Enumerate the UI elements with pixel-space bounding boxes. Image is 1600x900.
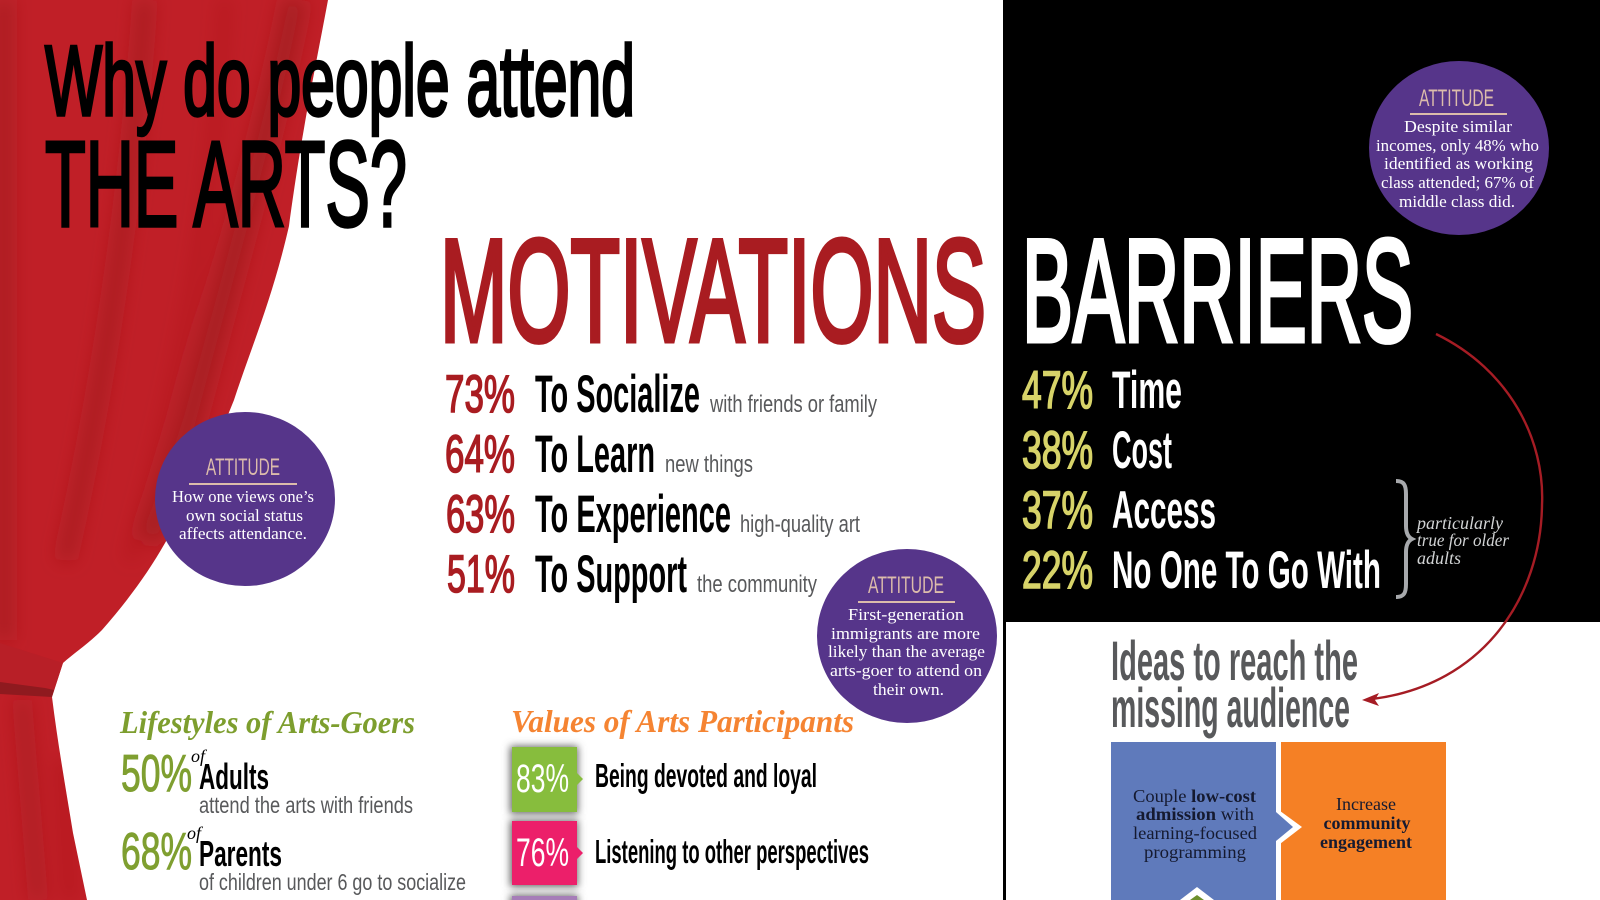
brace note: true for older (1417, 530, 1510, 550)
value: devoted and loyal: Being devoted and loyal (595, 757, 817, 794)
curtain (0, 0, 340, 900)
motivation: support: To Support (535, 545, 687, 604)
motivation: socialize: with friends or family (709, 391, 877, 418)
motivation: socialize: To Socialize (535, 365, 700, 424)
attitude circle: center (817, 549, 997, 723)
lifestyles heading: Lifestyles of Arts-Goers (119, 704, 415, 740)
motivation: learn: new things (665, 451, 753, 478)
heading: motivations: MOTIVATIONS (440, 209, 986, 372)
idea: community engagement: engagement (1320, 832, 1412, 852)
values section (510, 703, 869, 900)
values heading: Values of Arts Participants (511, 703, 854, 739)
attitude circle: top right: class attended; 67% of (1381, 173, 1534, 192)
attitude circle: top right: identified as working (1384, 154, 1534, 173)
motivation: experience: To Experience (535, 485, 731, 544)
motivation: learn: 64% (445, 425, 515, 484)
stat: adults: Adults (199, 756, 269, 797)
idea: community engagement: Increase (1336, 794, 1396, 814)
attitude circle: top right: Despite similar (1404, 117, 1512, 136)
barriers list (1022, 361, 1381, 600)
value: devoted and loyal: 83% (516, 757, 569, 801)
motivation: socialize (445, 365, 877, 424)
brace note (1415, 513, 1510, 568)
stat: parents: 68% (121, 823, 192, 881)
brace note: particularly (1415, 513, 1503, 533)
motivations list (445, 365, 877, 604)
barrier: time: 47% (1022, 361, 1093, 420)
stat: adults: attend the arts with friends (199, 792, 413, 818)
brace note: adults (1417, 548, 1461, 568)
value: other perspectives: Listening to other perspectives (595, 833, 869, 870)
barrier: time (1022, 361, 1182, 420)
attitude circle: top right: ATTITUDE (1419, 85, 1494, 112)
stat: adults: of (191, 746, 208, 766)
motivation: support: 51% (447, 545, 515, 604)
barrier: no one to go with: 22% (1022, 541, 1093, 600)
motivation: socialize: 73% (445, 365, 515, 424)
vertical divider line (1003, 622, 1006, 900)
arrow: barriers to ideas (1362, 334, 1542, 706)
stat: parents: Parents (199, 833, 282, 874)
attitude circle: center: ATTITUDE (868, 572, 944, 599)
barrier: no one to go with: No One To Go With (1112, 541, 1381, 600)
idea: low-cost admission: Couple low-cost (1133, 786, 1256, 806)
attitude circle: left: affects attendance. (179, 524, 307, 543)
stat: adults: 50% (121, 745, 192, 803)
attitude circle: left: ATTITUDE (206, 454, 280, 481)
brace (1396, 481, 1412, 597)
attitude circle: left: own social status (186, 506, 303, 525)
value: other perspectives (510, 820, 869, 887)
attitude circle: left: How one views one’s (172, 487, 314, 506)
barriers black panel (1003, 0, 1600, 622)
value: third box cropped (510, 895, 578, 900)
barrier: cost: Cost (1112, 421, 1172, 480)
barrier: time: Time (1112, 361, 1182, 420)
value: devoted and loyal (510, 746, 817, 814)
attitude circle: center: arts-goer to attend on (830, 661, 983, 680)
attitude circle: center: immigrants are more (831, 624, 980, 643)
barrier: access: 37% (1022, 481, 1093, 540)
icon: up chevron (1180, 887, 1214, 900)
barrier: access: Access (1112, 481, 1216, 540)
stat: parents: of (187, 823, 204, 843)
attitude circle: center: likely than the average (828, 642, 985, 661)
ideas heading: Ideas to reach the (1111, 629, 1358, 692)
idea: low-cost admission: programming (1144, 842, 1246, 862)
stat: parents (121, 823, 466, 895)
idea: community engagement: community (1324, 813, 1410, 833)
title (45, 25, 635, 252)
idea: community engagement (1276, 742, 1446, 900)
motivation: experience: high-quality art (740, 511, 860, 538)
attitude circle: top right (1369, 61, 1549, 235)
attitude circle: center: First-generation (848, 605, 965, 624)
idea: low-cost admission: learning-focused (1133, 823, 1257, 843)
barrier: no one to go with (1022, 541, 1381, 600)
barrier: cost: 38% (1022, 421, 1093, 480)
attitude circle: center: their own. (873, 680, 944, 699)
motivation: support: the community (697, 571, 817, 598)
title: THE ARTS? (45, 116, 407, 252)
value: other perspectives: 76% (516, 831, 569, 875)
stat: adults (121, 745, 413, 818)
ideas heading: missing audience (1111, 676, 1350, 739)
attitude circle: top right: incomes, only 48% who (1376, 136, 1539, 155)
attitude circle: left (155, 412, 335, 586)
title: Why do people attend (45, 25, 635, 136)
barrier: access (1022, 481, 1216, 540)
motivation: experience: 63% (446, 485, 515, 544)
attitude circle: top right: middle class did. (1399, 192, 1515, 211)
stat: parents: of children under 6 go to socialize (199, 869, 466, 895)
idea: low-cost admission (1111, 742, 1276, 900)
motivation: learn: To Learn (535, 425, 655, 484)
ideas heading (1111, 629, 1358, 739)
lifestyles section (119, 704, 466, 895)
idea: low-cost admission: admission with (1136, 804, 1254, 824)
